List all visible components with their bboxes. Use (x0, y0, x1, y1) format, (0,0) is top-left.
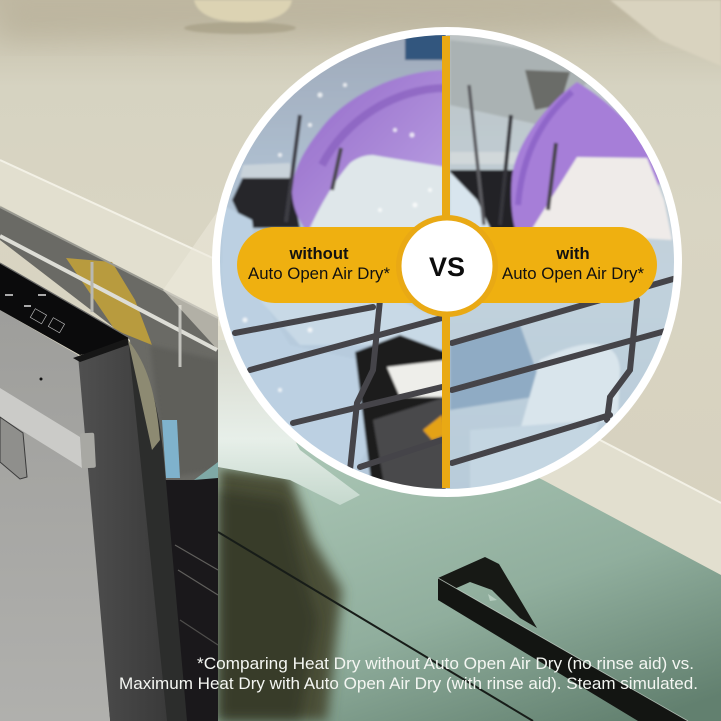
rack tines left (286, 115, 300, 222)
left half: without air dry, wet dishes (220, 35, 446, 489)
with label (502, 244, 645, 283)
decorative vase on counter (184, 0, 296, 34)
footnote text (119, 654, 698, 693)
dishwasher interior and rack (0, 207, 218, 721)
dishwasher control panel (0, 263, 128, 362)
lens white ring (212, 27, 682, 497)
with label: with (555, 244, 590, 263)
VS badge (396, 215, 498, 317)
without label: Auto Open Air Dry* (248, 264, 391, 283)
green cabinet front (218, 440, 721, 721)
purple plate wet (292, 70, 446, 232)
with label: Auto Open Air Dry* (502, 264, 645, 283)
dishwasher stainless door front (0, 310, 110, 721)
lower dishes left (224, 208, 255, 230)
dishwasher door edge (73, 338, 187, 721)
comparison lens (200, 20, 692, 510)
zoom light cone (163, 205, 360, 505)
yellow divider (442, 36, 450, 488)
footnote text: *Comparing Heat Dry without Auto Open Air Dry (no rinse aid) vs. (197, 654, 694, 673)
yellow label pill (237, 227, 657, 303)
black cabinet handle (438, 557, 688, 721)
white container dry (530, 157, 672, 240)
wire racks (235, 277, 680, 470)
rack tines right (469, 85, 484, 225)
right half: with air dry, dry dishes (446, 35, 674, 489)
without label: without (289, 244, 349, 263)
lower dishes right (450, 325, 545, 410)
white container wet (308, 155, 446, 232)
water droplets (242, 83, 432, 392)
VS badge: VS (429, 252, 465, 282)
without label (248, 244, 391, 283)
footnote text: Maximum Heat Dry with Auto Open Air Dry (with rinse aid). Steam simulated. (119, 674, 698, 693)
purple plate dry (511, 82, 665, 232)
